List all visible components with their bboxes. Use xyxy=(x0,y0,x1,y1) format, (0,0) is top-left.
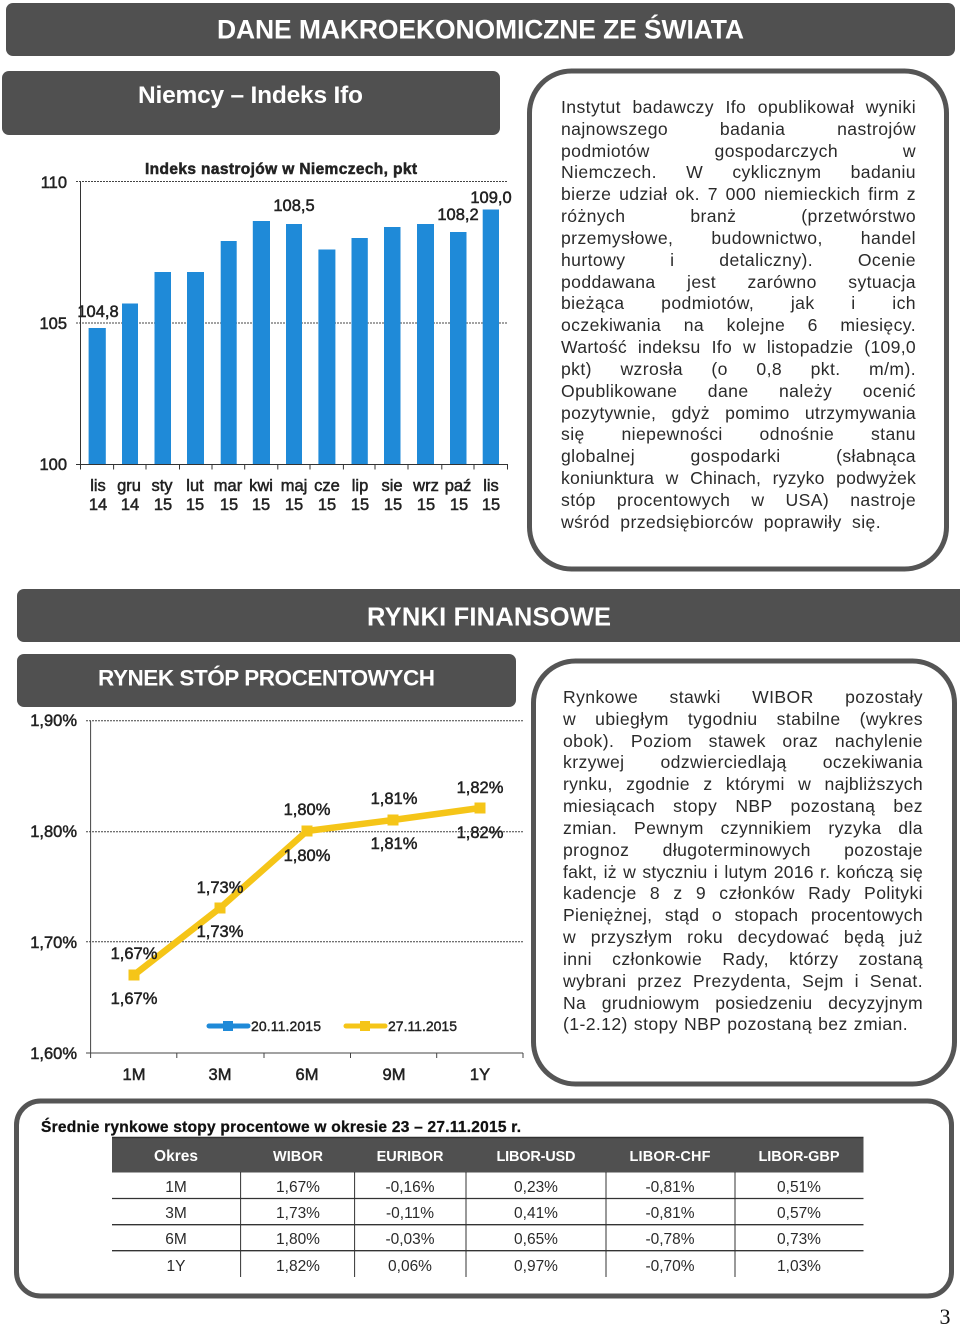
rates table: -0,70% xyxy=(645,1258,695,1275)
rates table: -0,03% xyxy=(385,1231,435,1248)
line chart: stopy procentowe: 1,82% xyxy=(457,824,504,842)
text block: Ifo commentary: się niepewności odnośnie stanu xyxy=(561,424,916,444)
text block: WIBOR commentary: (1-2.12) stopy NBP pozostaną bez zmian. xyxy=(563,1014,908,1034)
text block: WIBOR commentary: prognoz długoterminowych pozostaje xyxy=(563,840,923,860)
rates table: 0,97% xyxy=(514,1258,558,1275)
bar chart: Indeks nastrojów w Niemczech: 15 xyxy=(351,496,369,514)
line chart: stopy procentowe: 3M xyxy=(209,1066,231,1084)
rates table: 1,67% xyxy=(276,1179,320,1196)
text block: WIBOR commentary: krzywej odzwierciedlają oczekiwania xyxy=(563,752,923,772)
bar chart: Indeks nastrojów w Niemczech: 15 xyxy=(384,496,402,514)
text block: Ifo commentary: Wartość indeksu Ifo w listopadzie (109,0 xyxy=(561,337,916,357)
rates table: 1M xyxy=(165,1179,187,1196)
text block: Ifo commentary: bierze udział ok. 7 000 niemieckich firm z xyxy=(561,184,916,204)
bar chart: Indeks nastrojów w Niemczech: 104,8 xyxy=(77,303,119,321)
banner: Rynki finansowe: RYNKI FINANSOWE xyxy=(367,604,611,632)
text block: WIBOR commentary: rynku, zgodnie z którymi w najbliższych xyxy=(563,774,923,794)
bar chart: Indeks nastrojów w Niemczech: 108,5 xyxy=(273,197,315,215)
rates table: LIBOR-GBP xyxy=(758,1149,840,1165)
text block: WIBOR commentary xyxy=(563,687,923,1034)
line chart: stopy procentowe: 1,67% xyxy=(111,990,158,1008)
text block: Ifo commentary: poddawana jest zarówno sytuacja xyxy=(561,272,916,292)
rates table: 1,82% xyxy=(276,1258,320,1275)
line chart: stopy procentowe: 1,81% xyxy=(371,790,418,808)
bar chart: Indeks nastrojów w Niemczech: 108,2 xyxy=(437,206,479,224)
text block: WIBOR commentary: Na grudniowym posiedzeniu decyzyjnym xyxy=(563,993,923,1013)
rates table: 1,73% xyxy=(276,1205,320,1222)
banner: Rynki finansowe xyxy=(17,589,960,642)
rates table: -0,11% xyxy=(386,1205,434,1222)
text block: Ifo commentary: różnych branż (przetwórstwo xyxy=(561,206,916,226)
heading: Niemcy – Indeks Ifo xyxy=(2,71,500,135)
bar chart: Indeks nastrojów w Niemczech: 15 xyxy=(220,496,238,514)
text block: WIBOR commentary: fakt, iż w styczniu i lutym 2016 r. kończą się xyxy=(563,862,923,882)
rates table: LIBOR-USD xyxy=(496,1149,576,1165)
rates table: -0,78% xyxy=(645,1231,695,1248)
line chart: stopy procentowe: 6M xyxy=(296,1066,318,1084)
text block: Ifo commentary: pozytywnie, gdyż pomimo utrzymywania xyxy=(561,403,916,423)
text block: WIBOR commentary: zmian. Pewnym czynnikiem ryzyka dla xyxy=(563,818,923,838)
line chart: stopy procentowe: 1,90% xyxy=(30,712,77,730)
text block: Ifo commentary: koniunktura w Chinach, ryzyko podwyżek xyxy=(561,468,916,488)
bar chart: Indeks nastrojów w Niemczech: 105 xyxy=(39,315,67,333)
legend: 27.11.2015 xyxy=(388,1018,457,1034)
text block: Ifo commentary: najnowszego badania nastrojów xyxy=(561,119,916,139)
main title banner xyxy=(6,3,955,56)
bar chart: Indeks nastrojów w Niemczech: 15 xyxy=(318,496,336,514)
bar chart: Indeks nastrojów w Niemczech: paź xyxy=(445,477,471,495)
rates table: 0,41% xyxy=(514,1205,558,1222)
bar chart: Indeks nastrojów w Niemczech: 109,0 xyxy=(470,189,512,207)
bar chart: Indeks nastrojów w Niemczech: 15 xyxy=(450,496,468,514)
bar chart: Indeks nastrojów w Niemczech: 15 xyxy=(285,496,303,514)
bar chart: Indeks nastrojów w Niemczech: 15 xyxy=(154,496,172,514)
rates table: -0,16% xyxy=(385,1179,435,1196)
panel: Ifo commentary frame xyxy=(530,71,946,569)
rates table: 6M xyxy=(165,1231,187,1248)
main title banner: DANE MAKROEKONOMICZNE ZE ŚWIATA xyxy=(217,14,744,44)
line chart: stopy procentowe: 1,70% xyxy=(30,934,77,952)
heading: Rynek stóp procentowych xyxy=(17,654,516,707)
text block: WIBOR commentary: w ubiegłym tygodniu stabilne (wykres xyxy=(563,709,923,729)
text block: Ifo commentary: Opublikowane dane należy ocenić xyxy=(561,381,916,401)
line chart: stopy procentowe: 1,80% xyxy=(30,823,77,841)
text block: Ifo commentary: globalnej gospodarki (słabnąca xyxy=(561,446,916,466)
bar chart: Indeks nastrojów w Niemczech: maj xyxy=(281,477,307,495)
line chart: stopy procentowe: 1M xyxy=(123,1066,145,1084)
text block: Ifo commentary: podmiotów gospodarczych w xyxy=(561,141,916,161)
heading: Rynek stóp procentowych: RYNEK STÓP PROCENTOWYCH xyxy=(98,666,435,690)
line chart: stopy procentowe: 1,73% xyxy=(197,879,244,897)
bar chart: Indeks nastrojów w Niemczech: lis xyxy=(483,477,499,495)
text block: Ifo commentary: Instytut badawczy Ifo opublikował wyniki xyxy=(561,97,916,117)
bar chart: Indeks nastrojów w Niemczech: lis xyxy=(90,477,106,495)
text block: Ifo commentary: bieżąca podmiotów, jak i ich xyxy=(561,293,916,313)
line chart: stopy procentowe: 1,67% xyxy=(111,945,158,963)
text block: WIBOR commentary: inni członkowie Rady, którzy zostaną xyxy=(563,949,923,969)
line chart: stopy procentowe: 9M xyxy=(383,1066,405,1084)
bar chart: Indeks nastrojów w Niemczech: 14 xyxy=(89,496,107,514)
rates table: 0,23% xyxy=(514,1179,558,1196)
rates table: 0,73% xyxy=(777,1231,821,1248)
bar chart: Indeks nastrojów w Niemczech: 15 xyxy=(417,496,435,514)
bar chart: Indeks nastrojów w Niemczech: lip xyxy=(352,477,368,495)
text block: Ifo commentary: hurtowy i detaliczny). Ocenie xyxy=(561,250,916,270)
bar chart: Indeks nastrojów w Niemczech: sie xyxy=(381,477,403,495)
bar chart: Indeks nastrojów w Niemczech: 110 xyxy=(41,174,67,192)
line chart: stopy procentowe: 1Y xyxy=(470,1066,490,1084)
bar chart: Indeks nastrojów w Niemczech: Indeks nastrojów w Niemczech, pkt xyxy=(145,161,417,178)
panel: WIBOR commentary frame xyxy=(534,661,954,1084)
legend xyxy=(209,1018,457,1034)
table heading: Średnie rynkowe stopy procentowe w okresie 23 – 27.11.2015 r. xyxy=(41,1118,521,1136)
text block: WIBOR commentary: miesiącach stopy NBP pozostaną bez xyxy=(563,796,923,816)
rates table: 0,65% xyxy=(514,1231,558,1248)
line chart: stopy procentowe: 1,80% xyxy=(284,847,331,865)
rates table: -0,81% xyxy=(645,1179,695,1196)
bar chart: Indeks nastrojów w Niemczech: gru xyxy=(117,477,141,495)
rates table: 1,03% xyxy=(777,1258,821,1275)
heading: Niemcy – Indeks Ifo: Niemcy – Indeks Ifo xyxy=(138,82,363,109)
rates table: 1,80% xyxy=(276,1231,320,1248)
text block: Ifo commentary: oczekiwania na kolejne 6 miesięcy. xyxy=(561,315,916,335)
text block: Ifo commentary: przemysłowe, budownictwo, handel xyxy=(561,228,916,248)
rates table: EURIBOR xyxy=(377,1149,444,1165)
bar chart: Indeks nastrojów w Niemczech xyxy=(39,161,512,514)
bar chart: Indeks nastrojów w Niemczech: sty xyxy=(151,477,173,495)
bar chart: Indeks nastrojów w Niemczech: mar xyxy=(214,477,243,495)
rates table xyxy=(112,1137,864,1277)
bar chart: Indeks nastrojów w Niemczech: cze xyxy=(314,477,340,495)
text block: Ifo commentary: wśród przedsiębiorców poprawiły się. xyxy=(561,512,881,532)
bar chart: Indeks nastrojów w Niemczech: 100 xyxy=(39,456,67,474)
text block: WIBOR commentary: wybrani przez Prezydenta, Sejm i Senat. xyxy=(563,971,923,991)
rates table: 1Y xyxy=(167,1258,185,1275)
text block: WIBOR commentary: kadencje 8 z 9 członków Rady Polityki xyxy=(563,883,923,903)
text block: Ifo commentary: pkt) wzrosła (o 0,8 pkt. m/m). xyxy=(561,359,916,379)
line chart: stopy procentowe: 1,73% xyxy=(197,923,244,941)
bar chart: Indeks nastrojów w Niemczech: 15 xyxy=(482,496,500,514)
rates table: 3M xyxy=(165,1205,187,1222)
bar chart: Indeks nastrojów w Niemczech: 15 xyxy=(186,496,204,514)
panel: table of average rates xyxy=(16,1101,952,1296)
rates table: 0,51% xyxy=(777,1179,821,1196)
rates table: -0,81% xyxy=(645,1205,695,1222)
text block: WIBOR commentary: obok). Poziom stawek oraz nachylenie xyxy=(563,731,923,751)
line chart: stopy procentowe: 1,80% xyxy=(284,801,331,819)
legend: 20.11.2015 xyxy=(251,1018,321,1034)
bar chart: Indeks nastrojów w Niemczech: wrz xyxy=(412,477,439,495)
line chart: stopy procentowe: 1,82% xyxy=(457,779,504,797)
bar chart: Indeks nastrojów w Niemczech: kwi xyxy=(249,477,273,495)
rates table: 0,06% xyxy=(388,1258,432,1275)
line chart: stopy procentowe: 1,60% xyxy=(30,1045,77,1063)
bar chart: Indeks nastrojów w Niemczech: 14 xyxy=(121,496,139,514)
text block: Ifo commentary xyxy=(561,97,916,532)
text block: WIBOR commentary: Rynkowe stawki WIBOR pozostały xyxy=(563,687,923,707)
line chart: stopy procentowe: 1,81% xyxy=(371,835,418,853)
rates table: WIBOR xyxy=(273,1149,323,1165)
text block: WIBOR commentary: Pieniężnej, stąd o stopach procentowych xyxy=(563,905,923,925)
rates table: LIBOR-CHF xyxy=(630,1149,711,1165)
text block: Ifo commentary: Niemczech. W cyklicznym badaniu xyxy=(561,162,916,182)
bar chart: Indeks nastrojów w Niemczech: 15 xyxy=(252,496,270,514)
rates table: 0,57% xyxy=(777,1205,821,1222)
rates table: Okres xyxy=(154,1148,198,1165)
line chart: stopy procentowe xyxy=(30,712,523,1084)
text block: Ifo commentary: stóp procentowych w USA) nastroje xyxy=(561,490,916,510)
text block: WIBOR commentary: w przyszłym roku decydować będą już xyxy=(563,927,923,947)
bar chart: Indeks nastrojów w Niemczech: lut xyxy=(186,477,204,495)
